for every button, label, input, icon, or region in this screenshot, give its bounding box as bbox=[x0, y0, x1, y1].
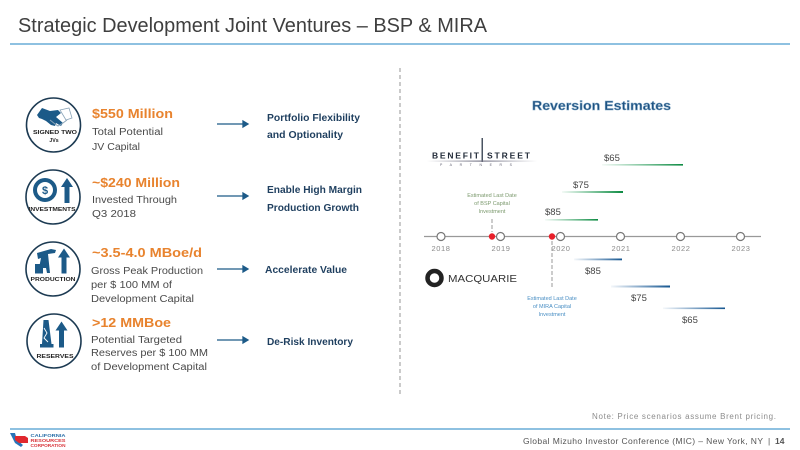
MIRA price bars bbox=[574, 258, 725, 326]
footer text: | bbox=[768, 436, 770, 446]
chart: timeline: 2020 bbox=[551, 244, 571, 253]
footer text: Global Mizuho Investor Conference (MIC) – New York, NY bbox=[523, 436, 763, 446]
arrow: margin bbox=[217, 193, 248, 199]
callout: MIRA last date: of MIRA Capital bbox=[533, 304, 571, 310]
logo: Benefit Street Partners bbox=[427, 138, 537, 167]
logo: California Resources: CORPORATION bbox=[30, 443, 66, 448]
heading: reversion estimates: Reversion Estimates bbox=[532, 98, 671, 113]
note: Note: Price scenarios assume Brent pricing. bbox=[592, 412, 776, 421]
icon: signed two JVs: JVs bbox=[49, 138, 59, 144]
BSP price bars bbox=[545, 153, 683, 221]
logo: California Resources bbox=[10, 433, 66, 448]
text: portfolio flexibility: and Optionality bbox=[267, 130, 343, 141]
BSP price bars: $65 bbox=[604, 153, 620, 164]
chart: timeline: 2022 bbox=[671, 244, 691, 253]
text: high margin bbox=[267, 185, 362, 214]
chart: timeline: 2021 bbox=[611, 244, 631, 253]
text: production bbox=[91, 245, 203, 305]
text: $550 million: $550 Million bbox=[92, 106, 173, 121]
icon: investments: $ bbox=[42, 185, 48, 197]
icon: reserves bbox=[27, 314, 81, 368]
arrow: accelerate bbox=[217, 266, 248, 272]
icon: signed two JVs bbox=[26, 98, 80, 152]
logo: California Resources: RESOURCES bbox=[30, 438, 66, 443]
icon: production: PRODUCTION bbox=[30, 277, 76, 283]
title: Strategic Development Joint Ventures – BSP & MIRA bbox=[18, 15, 488, 37]
text: $550 million bbox=[92, 106, 173, 153]
logo: California Resources: CALIFORNIA bbox=[30, 433, 66, 438]
logo: Macquarie: MACQUARIE bbox=[448, 273, 517, 285]
text: $550 million: Total Potential bbox=[92, 127, 163, 138]
icon: investments: INVESTMENTS bbox=[28, 207, 76, 213]
text: high margin: Production Growth bbox=[267, 203, 359, 214]
text: reserves bbox=[91, 315, 208, 373]
callout: BSP last date: of BSP Capital bbox=[474, 201, 510, 207]
text: $240 million: Q3 2018 bbox=[92, 209, 136, 220]
text: reserves: Reserves per $ 100 MM bbox=[91, 348, 208, 359]
text: $240 million: Invested Through bbox=[92, 195, 177, 206]
callout: BSP last date bbox=[467, 193, 517, 215]
callout: BSP last date: Estimated Last Date bbox=[467, 193, 517, 199]
MIRA price bars: $85 bbox=[585, 266, 601, 277]
callout: BSP last date: Investment bbox=[479, 209, 506, 215]
text: high margin: Enable High Margin bbox=[267, 185, 362, 196]
text: $550 million: JV Capital bbox=[92, 142, 140, 153]
text: reserves: Potential Targeted bbox=[91, 335, 182, 346]
icon: production bbox=[26, 242, 80, 296]
callout: MIRA last date bbox=[527, 296, 577, 318]
callout: MIRA last date: Estimated Last Date bbox=[527, 296, 577, 302]
logo: Benefit Street Partners: BENEFIT bbox=[432, 150, 480, 160]
arrow: de-risk bbox=[217, 337, 248, 343]
logo: Macquarie bbox=[428, 271, 517, 285]
callout: MIRA last date: Investment bbox=[539, 312, 566, 318]
arrow: portfolio bbox=[217, 121, 248, 127]
icon: reserves: RESERVES bbox=[36, 354, 74, 360]
footer text: 14 bbox=[775, 436, 785, 446]
text: $240 million bbox=[92, 175, 180, 220]
chart: timeline: 2018 bbox=[431, 244, 451, 253]
chart: timeline: 2019 bbox=[491, 244, 511, 253]
chart: timeline: 2023 bbox=[731, 244, 751, 253]
text: de-risk inventory: De-Risk Inventory bbox=[267, 337, 353, 348]
text: accelerate value: Accelerate Value bbox=[265, 265, 347, 276]
text: production: ~3.5-4.0 MBoe/d bbox=[92, 245, 202, 260]
text: production: Development Capital bbox=[91, 294, 194, 305]
MIRA price bars: $65 bbox=[682, 315, 698, 326]
icon: investments bbox=[26, 170, 80, 224]
panel: key metrics bbox=[26, 98, 208, 373]
text: portfolio flexibility: Portfolio Flexibility bbox=[267, 113, 360, 124]
text: $240 million: ~$240 Million bbox=[92, 175, 180, 190]
chart: timeline bbox=[424, 219, 761, 289]
text: production: per $ 100 MM of bbox=[91, 280, 172, 291]
icon: signed two JVs: SIGNED TWO bbox=[33, 130, 78, 136]
logo: Benefit Street Partners: STREET bbox=[487, 150, 531, 160]
MIRA price bars: $75 bbox=[631, 293, 647, 304]
logo: Benefit Street Partners: PARTNERS bbox=[440, 163, 513, 167]
text: reserves: >12 MMBoe bbox=[92, 315, 171, 330]
BSP price bars: $85 bbox=[545, 207, 561, 218]
text: portfolio flexibility bbox=[267, 113, 360, 141]
BSP price bars: $75 bbox=[573, 180, 589, 191]
text: production: Gross Peak Production bbox=[91, 266, 203, 277]
text: reserves: of Development Capital bbox=[91, 362, 207, 373]
